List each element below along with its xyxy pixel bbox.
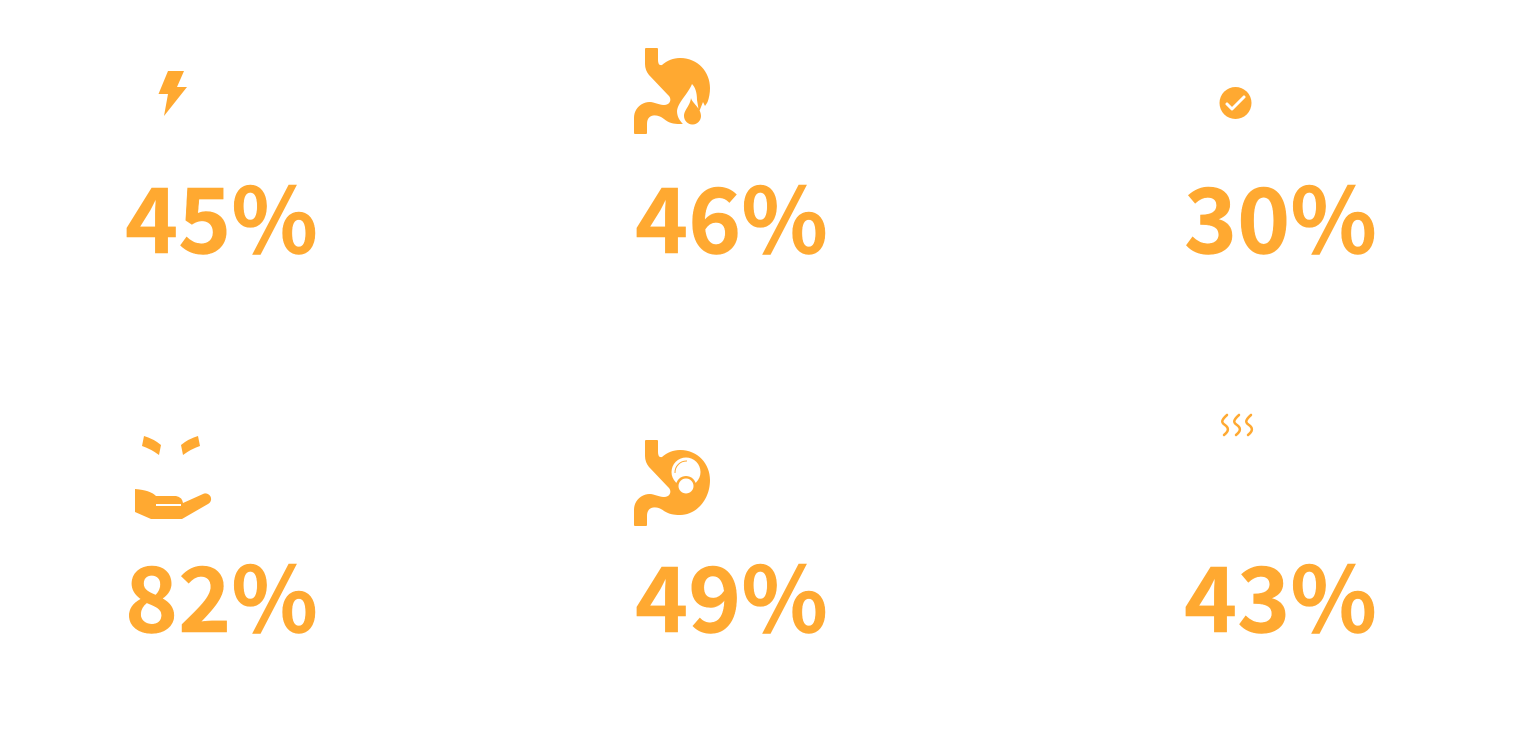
icon: check mark badge (1220, 87, 1252, 119)
stat: 82%: 82% (125, 528, 318, 658)
icon: stomach with ulcer bubbles (634, 440, 710, 526)
stat: 49%: 49% (635, 528, 828, 658)
stat: 43%: 43% (1184, 528, 1377, 658)
icon: stomach with flame (634, 48, 716, 134)
icon: lightning bolt (158, 71, 187, 116)
stat: 45%: 45% (125, 149, 318, 279)
stat: 30%: 30% (1184, 149, 1377, 279)
stat: 46%: 46% (635, 149, 828, 279)
icon: open hand with sparks (135, 436, 211, 519)
icon: steam waves (1222, 415, 1252, 435)
